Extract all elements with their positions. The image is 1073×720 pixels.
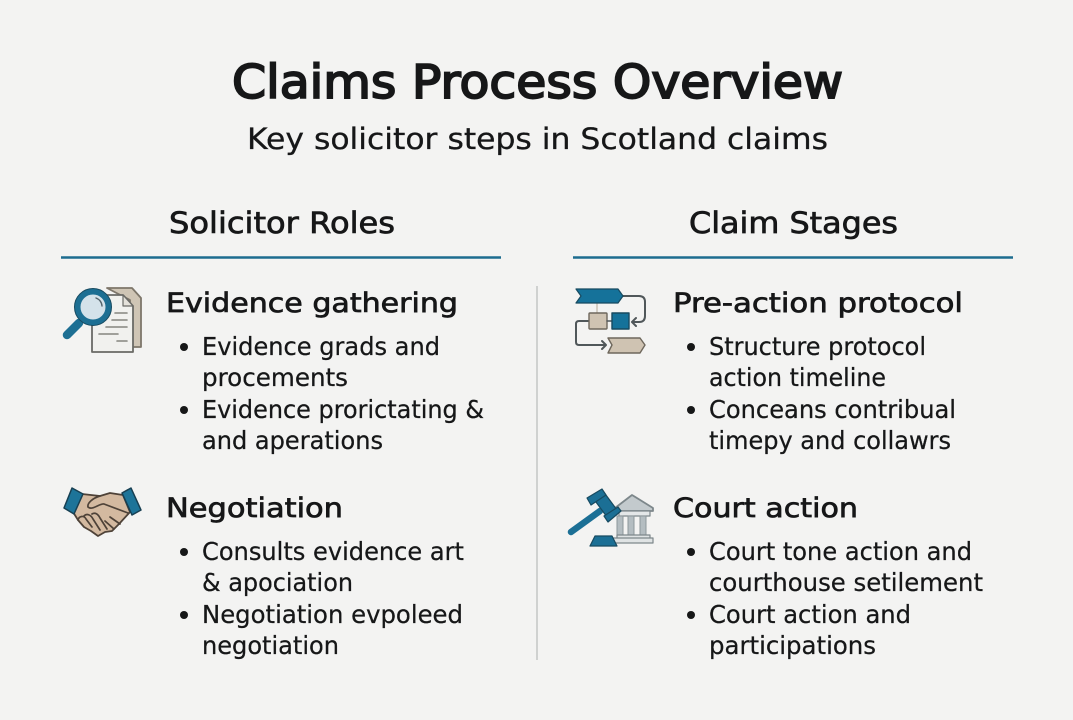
bullet list: timepy and collawrs xyxy=(709,426,951,455)
bullet list: participations xyxy=(709,631,876,660)
bullet list: Evidence grads and xyxy=(202,332,440,361)
bullet list: & apociation xyxy=(202,568,353,597)
icon: magnifying glass over documents xyxy=(67,288,141,352)
bullet list: Consults evidence art xyxy=(202,537,464,566)
bullet list: Court action and xyxy=(709,600,911,629)
bullet list xyxy=(687,332,956,455)
bullet list: Negotiation evpoleed xyxy=(202,600,463,629)
panel: claim stages xyxy=(571,206,1013,660)
bullet list: negotiation xyxy=(202,631,339,660)
item heading: Pre-action protocol xyxy=(673,288,963,319)
subtitle: Key solicitor steps in Scotland claims xyxy=(247,122,828,156)
item: negotiation xyxy=(166,493,464,660)
panel: solicitor roles xyxy=(61,206,501,660)
item heading: Negotiation xyxy=(166,493,343,524)
icon: gavel and courthouse xyxy=(571,489,653,546)
bullet list: Structure protocol xyxy=(709,332,926,361)
item heading: Evidence gathering xyxy=(166,288,458,319)
bullet list: and aperations xyxy=(202,426,383,455)
bullet list: Conceans contribual xyxy=(709,395,956,424)
item: pre-action protocol xyxy=(673,288,963,455)
heading: solicitor roles: Solicitor Roles xyxy=(169,206,395,240)
bullet list: Evidence prorictating & xyxy=(202,395,484,424)
icon: handshake xyxy=(64,488,141,536)
item: court action xyxy=(673,493,983,660)
bullet list xyxy=(687,537,983,660)
item: evidence gathering xyxy=(166,288,484,455)
bullet list xyxy=(180,332,484,455)
heading: claim stages: Claim Stages xyxy=(689,206,898,240)
bullet list: action timeline xyxy=(709,363,886,392)
bullet list xyxy=(180,537,464,660)
bullet list: courthouse setilement xyxy=(709,568,983,597)
bullet list: Court tone action and xyxy=(709,537,972,566)
title: Claims Process Overview xyxy=(232,55,843,109)
item heading: Court action xyxy=(673,493,858,524)
bullet list: procements xyxy=(202,363,348,392)
icon: process flow xyxy=(576,289,645,353)
